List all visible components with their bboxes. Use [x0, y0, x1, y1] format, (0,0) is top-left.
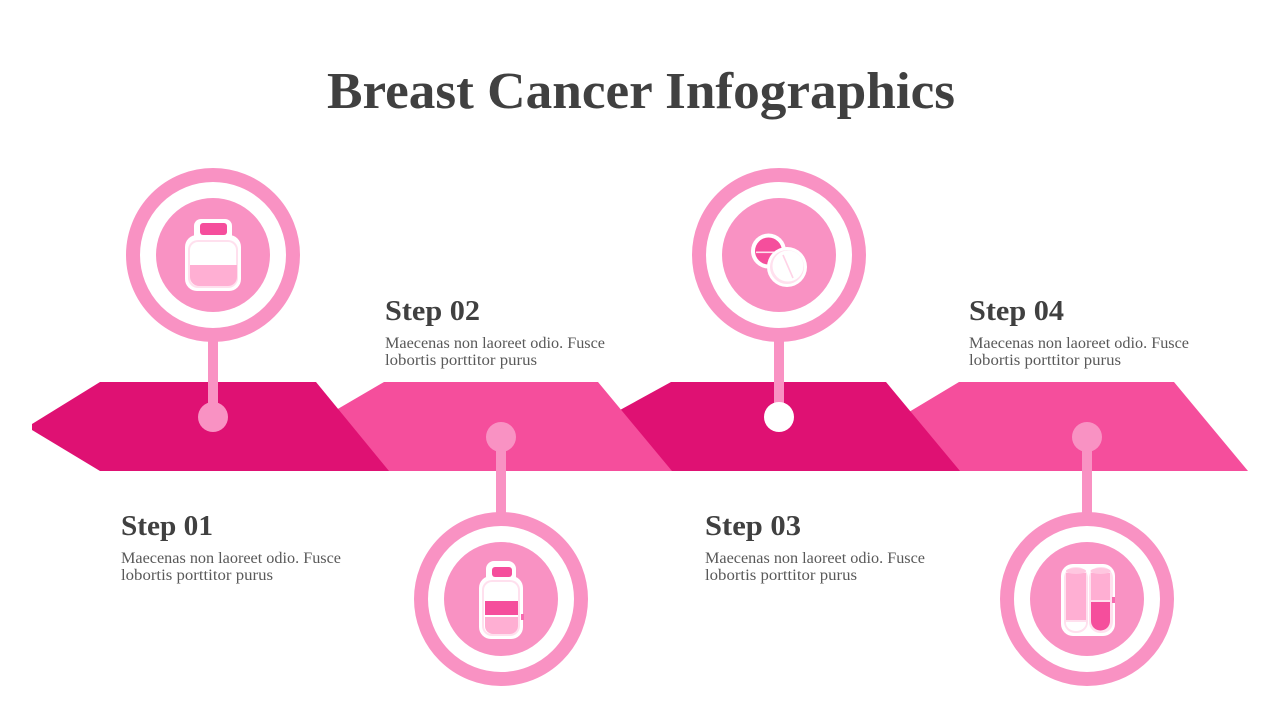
- text block: step 02: Step 02: [385, 295, 480, 327]
- title: Breast Cancer Infographics: [327, 63, 955, 120]
- text block: step 01: Step 01: [121, 510, 213, 542]
- text block: step 01: lobortis porttitor purus: [121, 567, 273, 584]
- marker: step 03: [699, 175, 859, 432]
- segment 4: [909, 382, 1248, 471]
- icon: wide bottle: [185, 219, 241, 291]
- text block: step 04: Maecenas non laoreet odio. Fusce: [969, 335, 1189, 352]
- marker: step 02: [421, 422, 581, 679]
- text block: step 02: Maecenas non laoreet odio. Fusce: [385, 335, 605, 352]
- text block: step 04: [969, 295, 1189, 369]
- icon: tall bottle: [479, 561, 524, 639]
- icon: pills: [751, 234, 807, 287]
- text block: step 03: lobortis porttitor purus: [705, 567, 857, 584]
- text block: step 01: Maecenas non laoreet odio. Fusce: [121, 550, 341, 567]
- text block: step 03: Maecenas non laoreet odio. Fusce: [705, 550, 925, 567]
- text block: step 01: [121, 510, 341, 584]
- segment 3: [620, 382, 960, 471]
- segment 1: [32, 382, 389, 471]
- marker: step 01: [133, 175, 293, 432]
- icon: test tubes: [1061, 564, 1115, 636]
- timeline ribbon: [32, 382, 1248, 471]
- text block: step 03: Step 03: [705, 510, 801, 542]
- marker: step 04: [1007, 422, 1167, 679]
- segment 2: [336, 382, 672, 471]
- text block: step 02: lobortis porttitor purus: [385, 352, 537, 369]
- text block: step 03: [705, 510, 925, 584]
- text block: step 02: [385, 295, 605, 369]
- text block: step 04: lobortis porttitor purus: [969, 352, 1121, 369]
- text block: step 04: Step 04: [969, 295, 1064, 327]
